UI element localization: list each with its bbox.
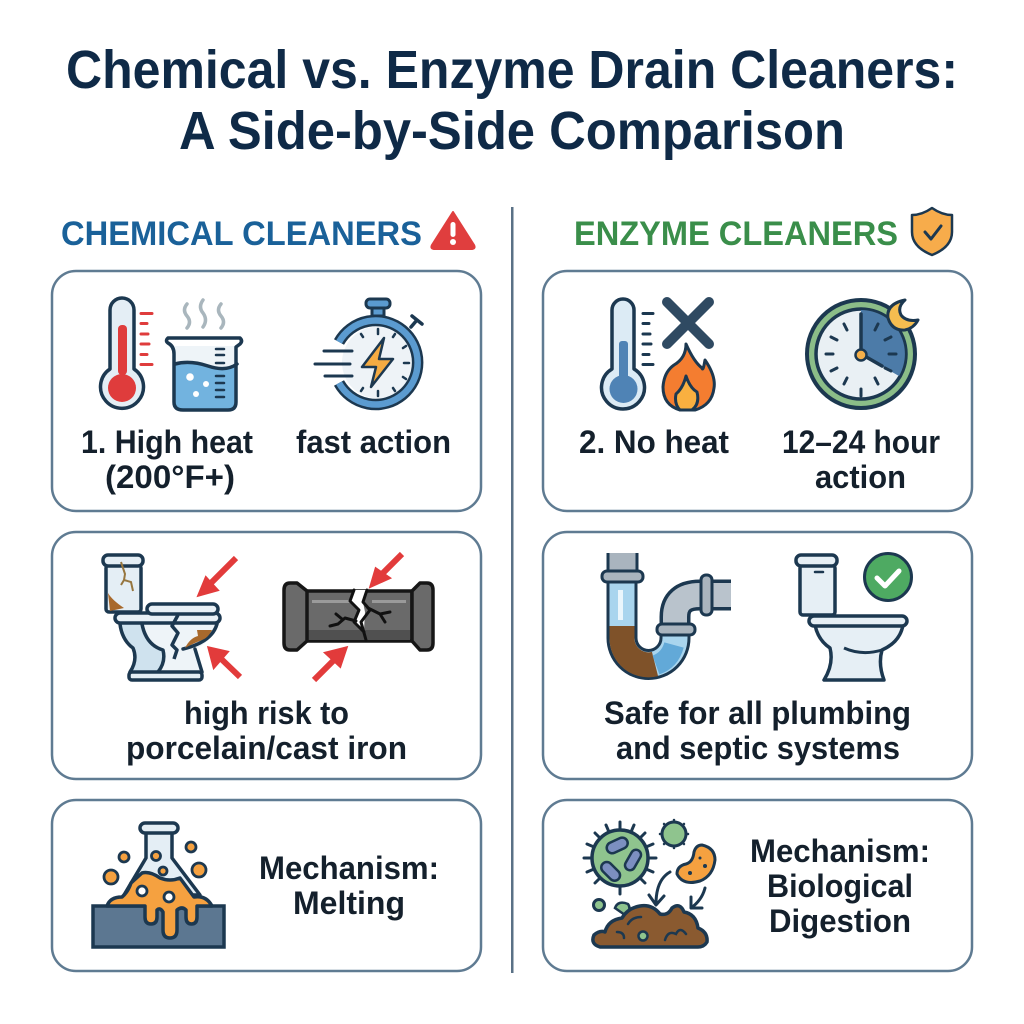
icon: flame (663, 344, 714, 410)
icon: cracked toilet (103, 555, 220, 680)
icon: intact toilet (796, 555, 907, 680)
arrows: pressure on toilet (199, 558, 240, 677)
text: high risk: porcelain/cast iron (126, 730, 407, 766)
icon: hot thermometer (100, 298, 152, 408)
column divider (511, 207, 514, 973)
text: safe for plumbing: Safe for all plumbing (604, 695, 911, 731)
title (66, 40, 958, 161)
text: high heat: 1. High heat (81, 424, 253, 460)
text: melting mechanism: Melting (293, 885, 405, 921)
text: 12-24 hour action: action (815, 459, 906, 495)
title: Chemical vs. Enzyme Drain Cleaners: (66, 40, 958, 100)
icon: p-trap pipe (602, 553, 731, 665)
icon: melting flask (93, 823, 224, 947)
text: no heat: 2. No heat (579, 424, 729, 460)
icon: warning triangle (431, 212, 475, 249)
text: biological digestion: Biological (767, 868, 913, 904)
icon: steaming beaker (166, 300, 242, 410)
icon: shield (912, 208, 952, 255)
icon: cracked cast iron pipe (284, 583, 433, 650)
icon: no cross (667, 302, 709, 344)
text: high risk: high risk to (184, 695, 349, 731)
text: biological digestion: Digestion (769, 903, 911, 939)
panel: enzyme mechanism (543, 800, 972, 971)
icon: bacteria (584, 820, 715, 908)
panel: chemical heat and speed (52, 271, 481, 511)
icon: stopwatch (315, 299, 422, 405)
text: melting mechanism: Mechanism: (259, 850, 439, 886)
panel: enzyme heat and speed (543, 271, 972, 511)
panel: chemical mechanism (52, 800, 481, 971)
text: fast action: fast action (296, 424, 451, 460)
icon: cool thermometer (602, 299, 653, 409)
heading: chemical cleaners: CHEMICAL CLEANERS (61, 215, 422, 253)
panel: chemical damage risk (52, 532, 481, 779)
heading: enzyme cleaners: ENZYME CLEANERS (574, 215, 898, 253)
arrows: pressure on pipe (314, 554, 402, 680)
text: safe for plumbing: and septic systems (616, 730, 900, 766)
text: high heat: (200°F+) (105, 459, 235, 495)
text: 12-24 hour action: 12–24 hour (782, 424, 940, 460)
text: biological digestion: Mechanism: (750, 833, 930, 869)
icon: clock with moon (807, 300, 918, 408)
panel: enzyme plumbing safety (543, 532, 972, 779)
title: A Side-by-Side Comparison (179, 101, 845, 161)
icon: organic waste pile (593, 900, 707, 947)
icon: green check badge (864, 554, 912, 600)
